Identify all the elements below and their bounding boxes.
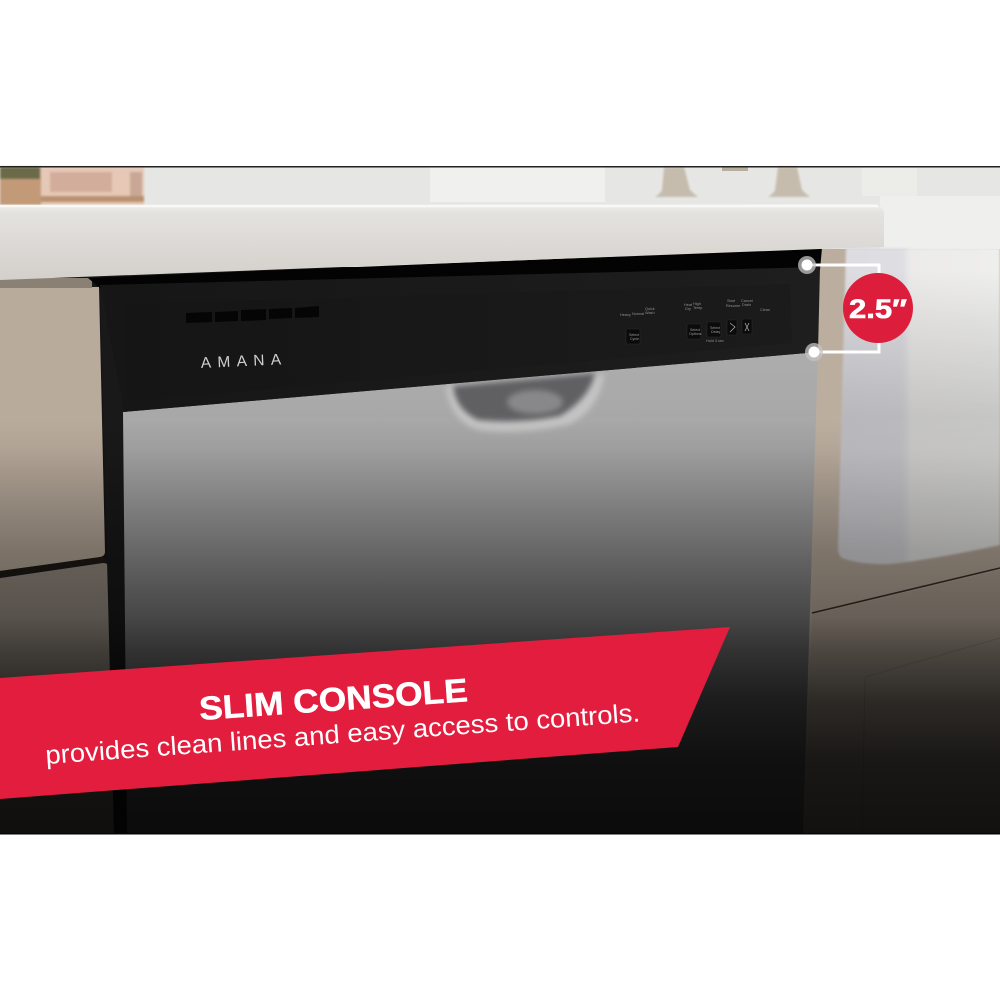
control labels: Drain bbox=[742, 303, 751, 307]
control labels: Clean bbox=[760, 308, 770, 312]
lower right drawer bbox=[804, 570, 1000, 834]
handle shadow bbox=[453, 373, 595, 421]
left lower drawer bbox=[0, 563, 114, 834]
countertop lip bbox=[0, 205, 878, 207]
drawer groove bbox=[812, 568, 1000, 613]
banner shape bbox=[0, 627, 730, 799]
dark gradient overlay bbox=[0, 420, 1000, 834]
dimension callout bbox=[798, 256, 913, 361]
red badge bbox=[843, 273, 913, 343]
sink surface bbox=[838, 248, 1000, 564]
handle highlight bbox=[507, 390, 563, 414]
drawer gap bbox=[0, 557, 108, 578]
control labels: Hold 3 sec bbox=[706, 339, 724, 343]
door handle recess bbox=[446, 373, 604, 432]
control buttons: Options bbox=[689, 332, 702, 336]
left upper cabinet bbox=[0, 287, 105, 571]
dishwasher door bbox=[123, 352, 818, 834]
vent slots bbox=[186, 306, 319, 323]
control labels: Dry bbox=[685, 307, 691, 311]
right tan cabinet bbox=[803, 249, 1000, 834]
bottom marker bbox=[805, 343, 823, 361]
banner heading: SLIM CONSOLE bbox=[198, 671, 469, 727]
control labels: Quick bbox=[645, 307, 655, 311]
console inner recess bbox=[124, 284, 792, 402]
console panel bbox=[100, 267, 820, 412]
shadow under counter left bbox=[0, 278, 92, 288]
control buttons: Select bbox=[690, 328, 700, 332]
faucet center bbox=[722, 167, 748, 171]
drawer inset line bbox=[862, 638, 1000, 834]
photo: kitchen scene bbox=[0, 167, 1000, 834]
cup bbox=[862, 167, 917, 196]
control labels: Normal bbox=[632, 312, 644, 316]
control buttons: Select bbox=[710, 326, 720, 330]
control labels: Start bbox=[727, 299, 736, 303]
control buttons bbox=[626, 319, 752, 344]
frame bottom line bbox=[0, 833, 1000, 834]
banner body text: provides clean lines and easy access to controls. bbox=[44, 697, 641, 770]
dimension bracket bbox=[807, 265, 879, 352]
control buttons: Delay bbox=[711, 330, 720, 334]
wall backdrop bbox=[0, 167, 1000, 267]
faucet right bbox=[768, 167, 810, 197]
frame top line bbox=[0, 166, 1000, 168]
white container on counter bbox=[430, 167, 605, 202]
control labels: Heat bbox=[684, 303, 693, 307]
control buttons: Select bbox=[629, 333, 639, 337]
control labels: Heavy bbox=[620, 313, 631, 317]
brand: AMANA: AMANA bbox=[200, 351, 284, 372]
control labels: Wash bbox=[645, 311, 655, 315]
control labels: Resume bbox=[726, 304, 740, 308]
control labels bbox=[620, 299, 770, 343]
control buttons: Cycle bbox=[630, 337, 639, 341]
top marker bbox=[798, 256, 816, 274]
dishwasher left side bbox=[100, 285, 133, 834]
jar on counter bbox=[0, 167, 144, 205]
faucet left bbox=[655, 167, 698, 197]
sink shading bbox=[838, 248, 1000, 564]
handle rim bbox=[446, 374, 604, 432]
white sink top bbox=[880, 196, 1000, 250]
control labels: High bbox=[693, 302, 701, 306]
farmhouse sink apron bbox=[838, 248, 1000, 564]
badge value: 2.5″ bbox=[849, 294, 907, 324]
dark gap under counter bbox=[88, 248, 822, 288]
control labels: Cancel bbox=[741, 299, 753, 303]
red banner bbox=[0, 627, 730, 799]
control labels: Temp bbox=[693, 306, 702, 310]
countertop bbox=[0, 204, 884, 280]
scene base bbox=[0, 167, 1000, 834]
